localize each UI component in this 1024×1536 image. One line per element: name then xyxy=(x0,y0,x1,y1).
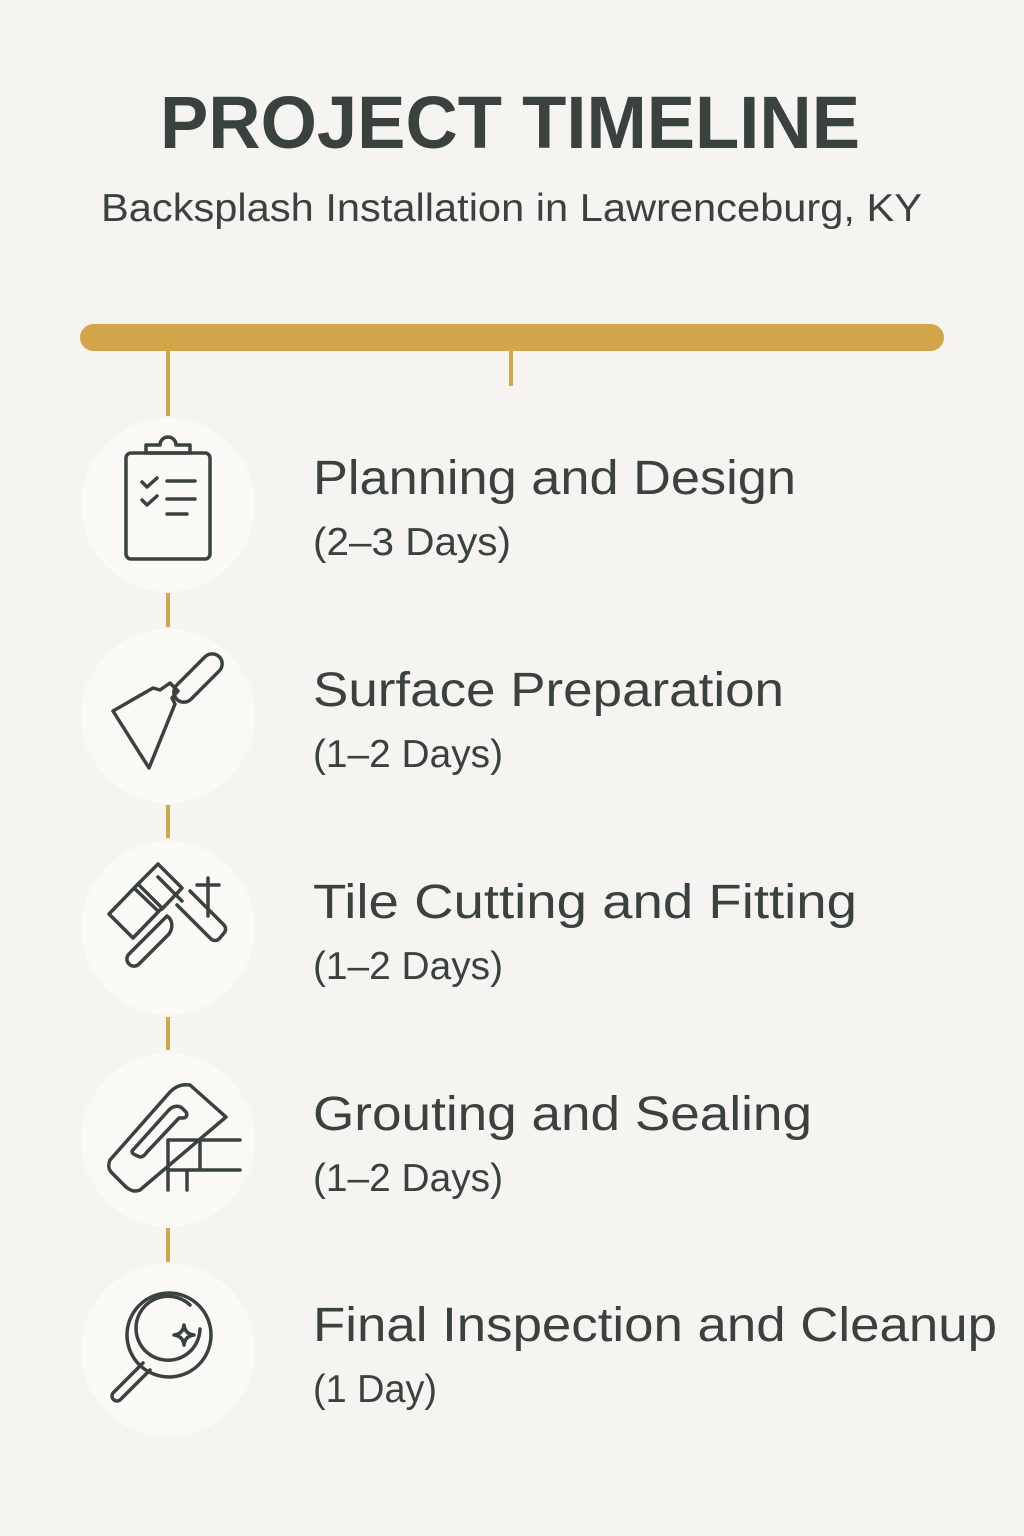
step 3 text: (1–2 Days) xyxy=(313,945,503,988)
step 2 text: (1–2 Days) xyxy=(313,733,503,776)
step 3: tile cutting xyxy=(81,841,857,1015)
step 1 text: Planning and Design xyxy=(313,452,796,505)
connector dashes xyxy=(166,593,170,1262)
step 2 text: Surface Preparation xyxy=(313,664,784,717)
icon: magnifier xyxy=(112,1293,211,1401)
step 3 text: Tile Cutting and Fitting xyxy=(313,876,857,929)
step 4 text xyxy=(313,1088,812,1200)
step 5 text: (1 Day) xyxy=(313,1368,437,1411)
step 4: grouting xyxy=(81,1053,812,1227)
step 1 text: (2–3 Days) xyxy=(313,521,511,564)
step 3 text xyxy=(313,876,857,988)
timeline bar xyxy=(80,324,944,416)
step 5: inspection xyxy=(81,1263,997,1437)
icon: scraper xyxy=(113,650,226,768)
step 4 text: (1–2 Days) xyxy=(313,1157,503,1200)
icon: grout float with tiles xyxy=(109,1085,240,1191)
icon: clipboard xyxy=(126,437,210,559)
step 2 text xyxy=(313,664,784,776)
title: PROJECT TIMELINE xyxy=(160,81,860,164)
step 1 text xyxy=(313,452,796,564)
subtitle: Backsplash Installation in Lawrenceburg, KY xyxy=(101,187,922,230)
step 1: planning xyxy=(81,418,796,592)
step 5 text: Final Inspection and Cleanup xyxy=(313,1299,997,1352)
step 4 text: Grouting and Sealing xyxy=(313,1088,812,1141)
step 2: surface prep xyxy=(81,629,784,803)
step 5 text xyxy=(313,1299,997,1411)
icon: tiles and cutter xyxy=(109,864,226,966)
